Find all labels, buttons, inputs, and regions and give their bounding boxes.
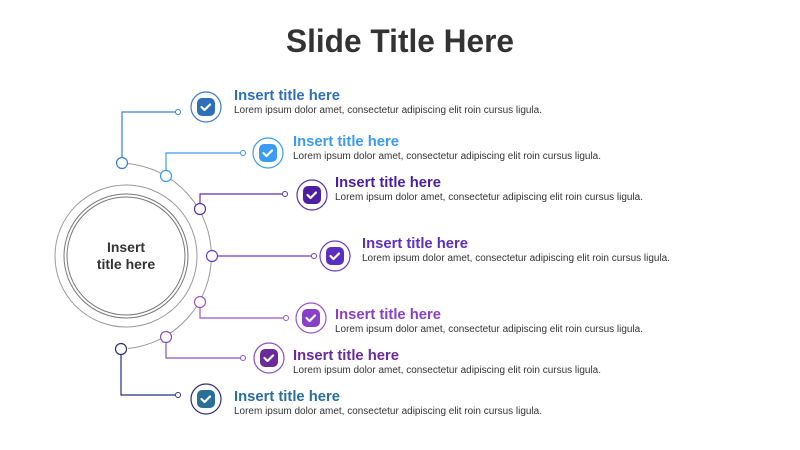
- item 6: Insert title here: [293, 348, 399, 364]
- item 3: Insert title here: [335, 175, 441, 191]
- item 4: Lorem ipsum dolor amet, consectetur adipiscing elit roin cursus ligula.: [362, 253, 670, 264]
- title: Slide Title Here: [286, 23, 514, 59]
- item 5: Lorem ipsum dolor amet, consectetur adipiscing elit roin cursus ligula.: [335, 324, 643, 335]
- center circle: Insert: [107, 239, 145, 255]
- item 7: Lorem ipsum dolor amet, consectetur adipiscing elit roin cursus ligula.: [234, 406, 542, 417]
- outer arc: [128, 164, 211, 348]
- item 6: [160, 332, 601, 376]
- item 1: Insert title here: [234, 88, 340, 104]
- item 2: Insert title here: [293, 134, 399, 150]
- item 1: Lorem ipsum dolor amet, consectetur adipiscing elit roin cursus ligula.: [234, 105, 542, 116]
- item 2: [160, 134, 601, 182]
- item 7: [116, 344, 542, 417]
- item 4: Insert title here: [362, 236, 468, 252]
- center circle: [55, 185, 197, 327]
- item 3: Lorem ipsum dolor amet, consectetur adipiscing elit roin cursus ligula.: [335, 192, 643, 203]
- item 6: Lorem ipsum dolor amet, consectetur adipiscing elit roin cursus ligula.: [293, 365, 601, 376]
- item 5: Insert title here: [335, 307, 441, 323]
- item 4: [206, 236, 670, 271]
- item 7: Insert title here: [234, 389, 340, 405]
- item 5: [194, 296, 643, 335]
- item 3: [194, 175, 643, 214]
- item 2: Lorem ipsum dolor amet, consectetur adipiscing elit roin cursus ligula.: [293, 151, 601, 162]
- item 1: [116, 88, 542, 168]
- center circle: title here: [97, 256, 155, 272]
